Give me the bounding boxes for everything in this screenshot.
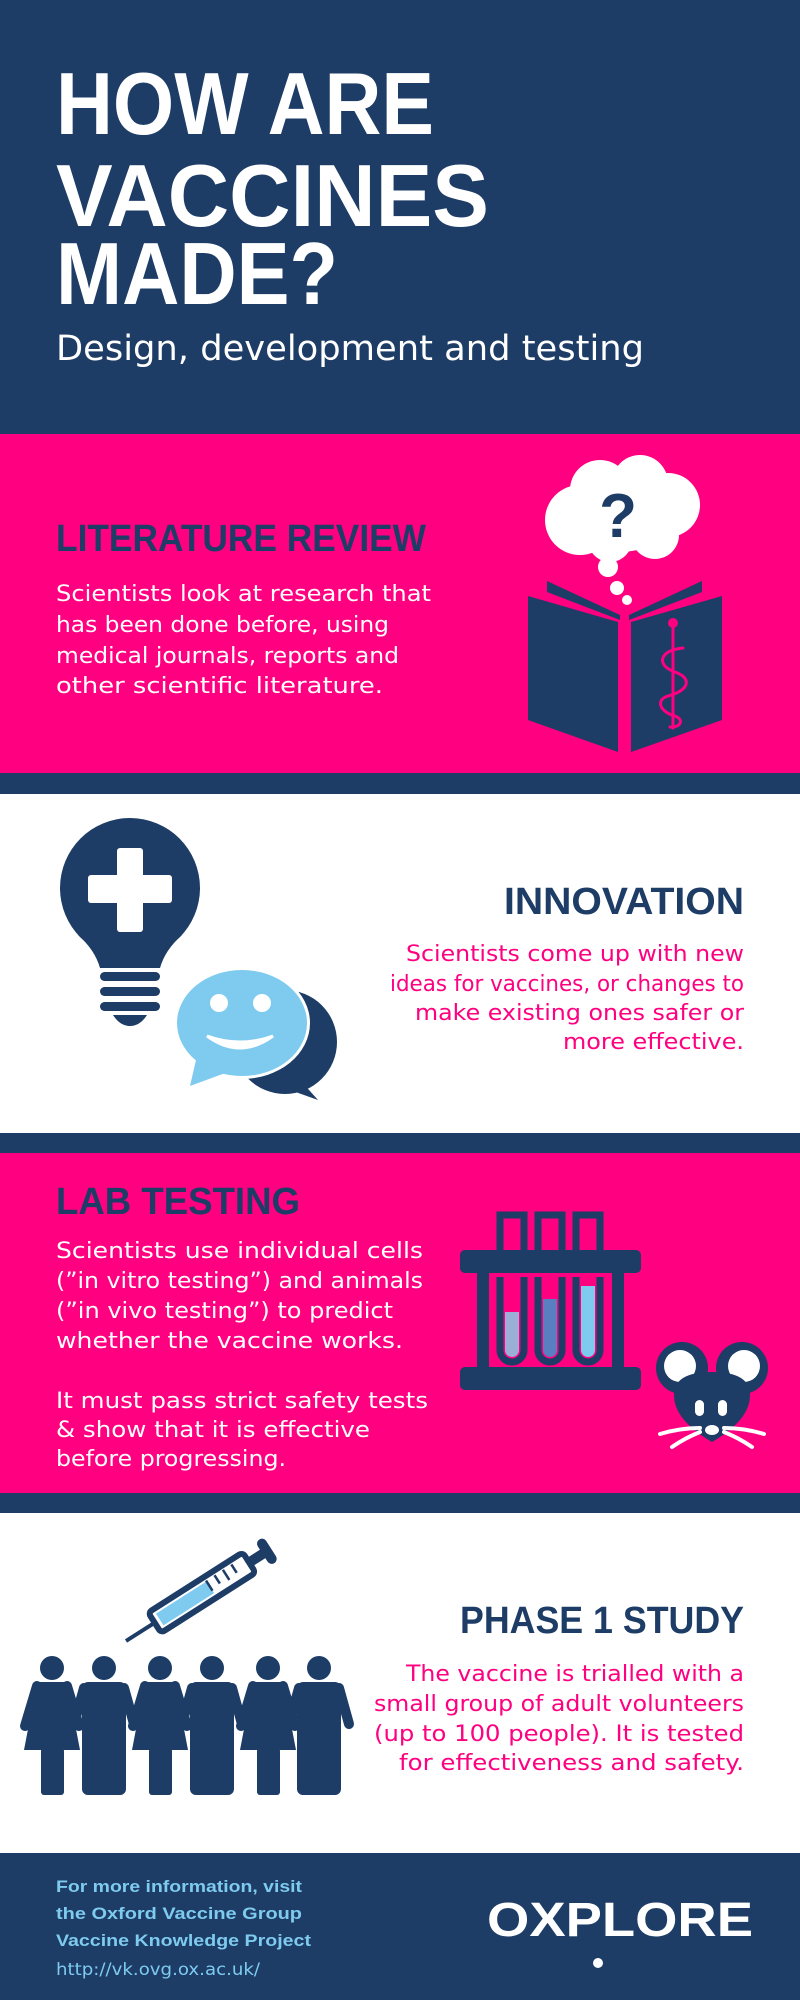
text: lab testing: whether the vaccine works.	[56, 1329, 403, 1354]
text: lab testing: It must pass strict safety tests	[56, 1389, 428, 1414]
text: literature review: Scientists look at research that	[56, 582, 431, 607]
divider stripe	[0, 1493, 800, 1513]
divider stripe	[0, 773, 800, 794]
text: innovation: more effective.	[563, 1030, 744, 1055]
text: phase 1 study: for effectiveness and safety.	[399, 1751, 744, 1776]
icon: group of people	[24, 1656, 349, 1795]
text: lab testing: & show that it is effective	[56, 1418, 370, 1443]
icon: test tube rack	[460, 1215, 641, 1390]
text: literature review: medical journals, reports and	[56, 644, 399, 669]
logo: oxplore	[487, 1894, 753, 1968]
heading: phase 1 study: PHASE 1 STUDY	[460, 1600, 744, 1642]
title	[56, 54, 489, 323]
text: innovation: ideas for vaccines, or changes to	[390, 972, 744, 997]
title: VACCINES	[56, 146, 489, 245]
heading: innovation: INNOVATION	[504, 881, 744, 923]
text: literature review	[56, 582, 431, 699]
footer text: Vaccine Knowledge Project	[56, 1931, 311, 1950]
icon: mouse	[656, 1342, 768, 1447]
footer	[0, 1853, 800, 2000]
icon: thought cloud: ?	[599, 482, 637, 551]
header panel	[0, 0, 800, 434]
panel: lab testing	[0, 1153, 800, 1493]
panel: innovation	[0, 794, 800, 1133]
title: HOW ARE	[56, 54, 434, 153]
logo: oxplore: OXPLORE	[487, 1894, 753, 1947]
panel: literature review	[0, 434, 800, 773]
icon: syringe	[118, 1537, 279, 1653]
text: phase 1 study	[374, 1662, 744, 1776]
text: literature review: other scientific literature.	[56, 674, 383, 699]
footer text: For more information, visit	[56, 1877, 302, 1896]
icon: speech bubbles smiley	[174, 967, 337, 1100]
text: phase 1 study: small group of adult volunteers	[374, 1692, 744, 1717]
text: lab testing: (”in vitro testing”) and animals	[56, 1269, 423, 1294]
text: innovation: make existing ones safer or	[415, 1001, 745, 1026]
heading: lab testing: LAB TESTING	[56, 1181, 300, 1223]
icon: light bulb with cross	[60, 818, 200, 1026]
heading: literature review: LITERATURE REVIEW	[56, 518, 426, 560]
subtitle: Design, development and testing	[56, 329, 644, 369]
title: MADE?	[56, 224, 338, 323]
text: lab testing: (”in vivo testing”) to predict	[56, 1299, 393, 1324]
footer text: http://vk.ovg.ox.ac.uk/	[56, 1960, 260, 1980]
text: phase 1 study: (up to 100 people). It is tested	[374, 1722, 744, 1747]
text: lab testing: before progressing.	[56, 1447, 286, 1472]
text: lab testing	[56, 1239, 428, 1472]
text: lab testing: Scientists use individual cells	[56, 1239, 423, 1264]
text: innovation	[390, 942, 745, 1055]
icon: thought cloud	[545, 455, 700, 605]
panel: phase 1 study	[0, 1513, 800, 1853]
text: literature review: has been done before, using	[56, 613, 389, 638]
footer text: the Oxford Vaccine Group	[56, 1904, 302, 1923]
icon: open book	[528, 581, 722, 752]
text: innovation: Scientists come up with new	[406, 942, 744, 967]
text: phase 1 study: The vaccine is trialled with a	[405, 1662, 744, 1687]
footer text	[56, 1877, 311, 1980]
divider stripe	[0, 1133, 800, 1153]
